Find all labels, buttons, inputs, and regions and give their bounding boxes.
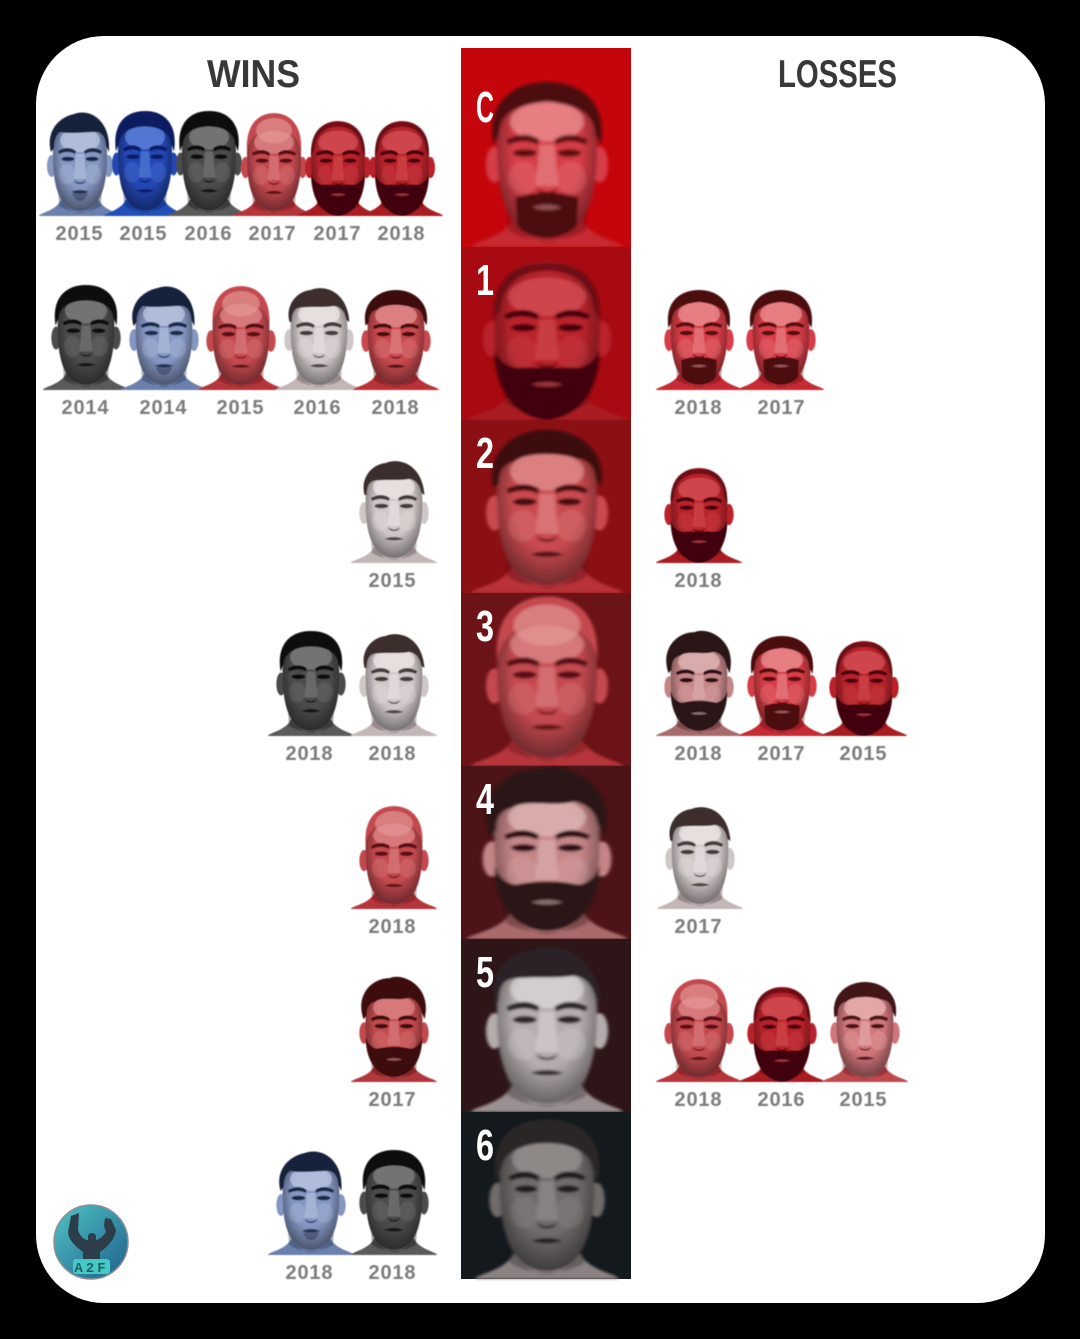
row 3 losses: 2018: [674, 743, 722, 765]
icon: logo badge: [54, 1205, 128, 1279]
row C wins: [39, 111, 443, 245]
row 6 wins: [268, 1150, 437, 1284]
row 2 loss: [656, 468, 742, 592]
row 4 loss: [657, 807, 743, 938]
heading: losses: LOSSES: [778, 53, 897, 96]
row 3 wins: 2018: [368, 743, 416, 765]
row 3 losses: 2017: [758, 743, 804, 765]
rank 3 tile: [461, 593, 631, 766]
row 4 loss: 2017: [674, 916, 722, 938]
row 5 losses: 2015: [840, 1089, 886, 1111]
row 3 losses: [656, 631, 907, 765]
row 2 win: [351, 461, 437, 592]
rank 2 tile: 2: [476, 429, 494, 478]
rank 6 tile: 6: [476, 1121, 494, 1170]
row 1 wins: 2014: [140, 397, 187, 419]
rank 1 tile: [461, 247, 631, 420]
row 6 wins: 2018: [368, 1262, 416, 1284]
row 1 losses: 2018: [674, 397, 722, 419]
rank 5 tile: 5: [476, 948, 494, 997]
row 1 wins: 2014: [62, 397, 109, 419]
rank 2 tile: [461, 420, 631, 593]
row 6 wins: 2018: [286, 1262, 332, 1284]
rank C tile: [461, 48, 631, 247]
rank 4 tile: [461, 766, 631, 939]
rank C tile: C: [476, 83, 494, 132]
panel: ranked column: [461, 48, 631, 1279]
row 3 wins: [268, 631, 437, 765]
row 1 wins: [43, 285, 439, 419]
row 5 losses: 2018: [674, 1089, 722, 1111]
row 5 losses: 2016: [758, 1089, 804, 1111]
row 2 win: 2015: [368, 570, 416, 592]
row 5 losses: [656, 979, 908, 1111]
rank 3 tile: 3: [476, 602, 494, 651]
row 4 win: [351, 806, 437, 938]
row C wins: 2017: [248, 223, 296, 245]
row C wins: 2017: [314, 223, 360, 245]
row 1 losses: [656, 290, 824, 419]
row 4 win: 2018: [368, 916, 416, 938]
row 1 wins: 2015: [216, 397, 264, 419]
row 1 losses: 2017: [758, 397, 804, 419]
row 3 wins: 2018: [286, 743, 332, 765]
row 5 win: 2017: [368, 1089, 416, 1111]
icon: logo badge: A2F: [74, 1261, 109, 1277]
rank 6 tile: [461, 1112, 631, 1279]
rank 5 tile: [461, 939, 631, 1112]
row 3 losses: 2015: [840, 743, 886, 765]
row 2 loss: 2018: [674, 570, 722, 592]
rank 4 tile: 4: [476, 775, 494, 824]
heading: wins: WINS: [207, 53, 300, 96]
row 1 wins: 2016: [294, 397, 340, 419]
rank 1 tile: 1: [476, 256, 494, 305]
row C wins: 2015: [56, 223, 102, 245]
row C wins: 2016: [184, 223, 232, 245]
row C wins: 2018: [378, 223, 424, 245]
row C wins: 2015: [120, 223, 166, 245]
row 5 win: [351, 977, 437, 1111]
row 1 wins: 2018: [372, 397, 418, 419]
